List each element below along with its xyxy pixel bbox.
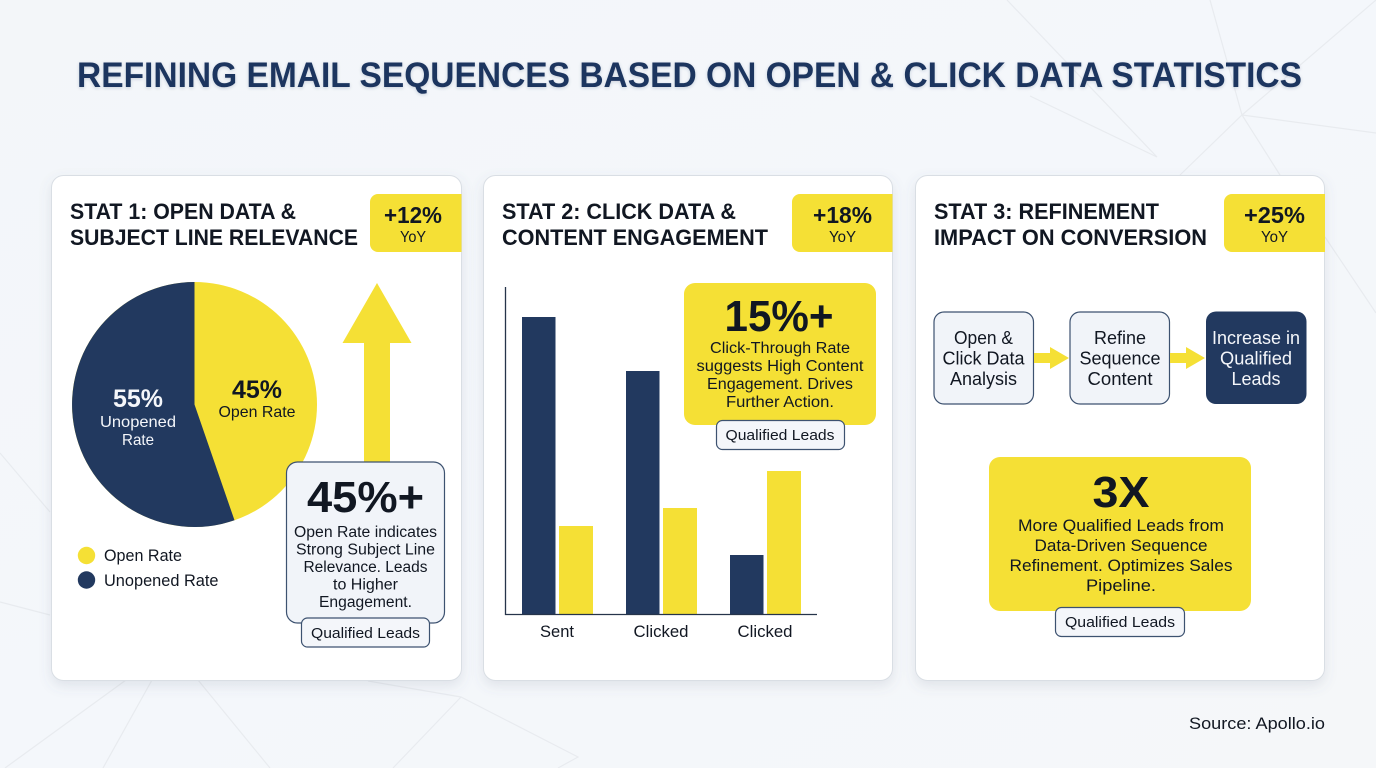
heading: stat 2: CONTENT ENGAGEMENT (502, 225, 769, 250)
callout: 15%+: Further Action. (726, 394, 834, 411)
flow step: increase in qualified leads: Increase in (1212, 328, 1300, 348)
callout: 45%+: Engagement. (319, 594, 412, 611)
bar chart: Sent (540, 623, 574, 641)
callout: 15%+: suggests High Content (696, 358, 864, 375)
bar chart (506, 287, 817, 641)
legend (78, 547, 218, 590)
callout: 3X: More Qualified Leads from (1018, 516, 1224, 535)
pie label: 55% unopened rate (100, 385, 176, 449)
flow step: refine sequence content: Sequence (1080, 348, 1160, 368)
badge: +25% YoY (1224, 194, 1325, 252)
callout: 45%+: 45%+ (307, 473, 424, 522)
pill: qualified leads: Qualified Leads (1065, 614, 1175, 631)
flow step: increase in qualified leads (1206, 312, 1306, 404)
callout: 45%+ (286, 462, 444, 623)
flow step: increase in qualified leads: Leads (1232, 369, 1280, 389)
flow step: open and click data analysis (934, 312, 1034, 404)
badge: +18% YoY: +18% (813, 202, 872, 228)
badge: +12% YoY: +12% (384, 202, 442, 228)
pill: qualified leads (1056, 608, 1184, 636)
heading: stat 3 (934, 199, 1207, 250)
flow step: refine sequence content (1070, 312, 1170, 404)
panel: stat 1 open data (52, 176, 462, 680)
pie label: 45% open rate (218, 376, 296, 421)
pie label: 45% open rate: Open Rate (218, 404, 296, 421)
arrow: upward trend (342, 283, 412, 470)
callout: 3X (989, 457, 1251, 611)
bar chart: Clicked (738, 623, 792, 641)
callout: 3X: 3X (1092, 468, 1150, 517)
callout: 3X: Data-Driven Sequence (1034, 536, 1208, 555)
callout: 45%+: Relevance. Leads (304, 559, 428, 576)
pill: qualified leads: Qualified Leads (311, 625, 420, 642)
bar chart: Clicked (634, 623, 688, 641)
callout: 3X: Pipeline. (1086, 576, 1156, 595)
callout: 45%+: Strong Subject Line (296, 542, 435, 558)
legend: Open Rate (104, 547, 182, 565)
heading: stat 2: STAT 2: CLICK DATA & (502, 199, 736, 224)
pie label: 55% unopened rate: Unopened (100, 414, 176, 431)
badge: +25% YoY: +25% (1244, 202, 1305, 228)
callout: 15%+: Engagement. Drives (707, 376, 853, 393)
panel: stat 2 click data (484, 176, 892, 680)
pie label: 55% unopened rate: 55% (113, 385, 163, 413)
callout: 15%+: Click-Through Rate (710, 340, 850, 357)
badge: +12% YoY (370, 194, 462, 252)
heading: stat 2 (502, 199, 769, 250)
heading: stat 3: STAT 3: REFINEMENT (934, 199, 1160, 224)
arrow: step 1 to 2 (1034, 347, 1069, 369)
pie label: 55% unopened rate: Rate (122, 432, 154, 449)
flow step: open and click data analysis: Open & (954, 328, 1013, 348)
badge: +25% YoY: YoY (1261, 229, 1288, 246)
pie chart: open vs unopened rate (72, 282, 317, 527)
heading: stat 1 (70, 199, 358, 250)
arrow: step 2 to 3 (1170, 347, 1205, 369)
badge: +12% YoY: YoY (400, 229, 426, 246)
legend: Unopened Rate (104, 572, 218, 590)
heading: stat 3: IMPACT ON CONVERSION (934, 225, 1207, 250)
callout: 15%+: 15%+ (724, 292, 834, 341)
heading: stat 1: STAT 1: OPEN DATA & (70, 199, 296, 224)
flow step: open and click data analysis: Analysis (950, 369, 1017, 389)
source note: Source: Apollo.io (1189, 714, 1325, 733)
flow step: refine sequence content: Refine (1094, 328, 1146, 348)
pill: qualified leads (302, 618, 430, 647)
callout: 45%+: Open Rate indicates (294, 524, 437, 541)
callout: 3X: Refinement. Optimizes Sales (1010, 556, 1232, 575)
flow step: open and click data analysis: Click Data (942, 348, 1025, 368)
callout: 45%+: to Higher (333, 576, 398, 594)
badge: +18% YoY: YoY (829, 229, 856, 246)
pie label: 45% open rate: 45% (232, 376, 282, 404)
flow step: increase in qualified leads: Qualified (1220, 348, 1292, 368)
title: REFINING EMAIL SEQUENCES BASED ON OPEN & CLICK DATA STATISTICS (77, 56, 1302, 95)
pill: qualified leads (716, 420, 844, 450)
callout: 15%+ (684, 283, 876, 425)
heading: stat 1: SUBJECT LINE RELEVANCE (70, 225, 358, 250)
badge: +18% YoY (792, 194, 892, 252)
flow step: refine sequence content: Content (1088, 369, 1152, 389)
pill: qualified leads: Qualified Leads (726, 427, 834, 444)
panel: stat 3 refinement impact (916, 176, 1325, 680)
